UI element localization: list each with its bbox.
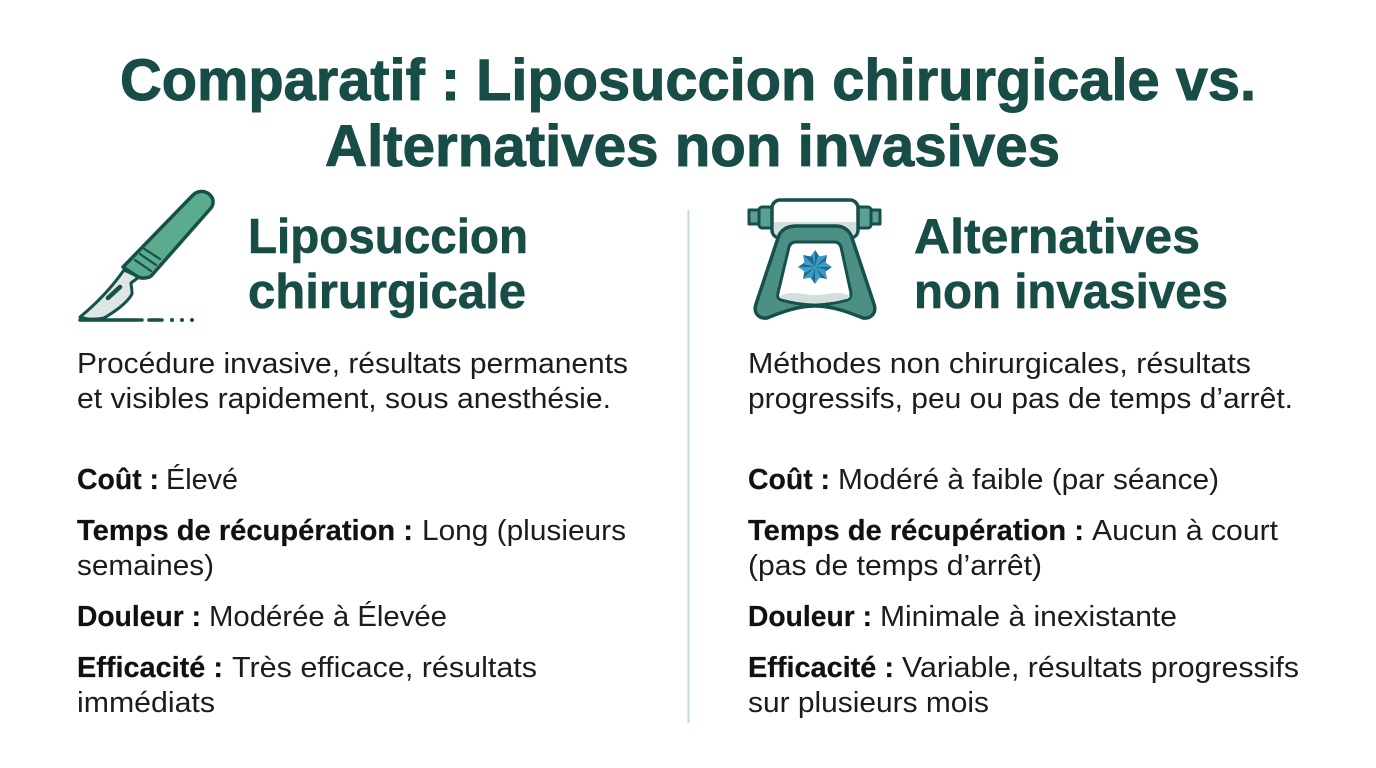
criterion: coût: Modéré à faible (par séance) — [838, 464, 1219, 496]
description: alternatives: Méthodes non chirurgicales, résultats — [748, 348, 1251, 380]
title: Alternatives non invasives — [325, 114, 1060, 179]
criterion: efficacité: sur plusieurs mois — [748, 687, 989, 719]
criterion: douleur — [748, 601, 1177, 633]
criterion: efficacité — [748, 652, 1299, 719]
criterion: douleur: Douleur : — [77, 601, 201, 633]
heading: liposuccion chirurgicale — [248, 210, 528, 319]
criterion: coût: Coût : — [77, 464, 159, 496]
title — [120, 48, 1256, 179]
description: liposuccion — [77, 348, 628, 415]
heading: alternatives non invasives: non invasives — [914, 265, 1228, 319]
icon: non-invasive device — [749, 200, 880, 318]
criterion: efficacité: Très efficace, résultats — [232, 652, 537, 684]
description: alternatives: progressifs, peu ou pas de temps d’arrêt. — [748, 383, 1293, 415]
icon: scalpel — [80, 191, 213, 322]
criterion: douleur: Modérée à Élevée — [209, 600, 447, 633]
heading: liposuccion chirurgicale: chirurgicale — [248, 265, 526, 319]
criterion: temps de récupération: semaines) — [77, 550, 214, 582]
criterion: efficacité: Efficacité : — [77, 652, 223, 684]
criterion: coût — [77, 463, 238, 496]
criterion: efficacité: Variable, résultats progressifs — [902, 652, 1299, 684]
heading: liposuccion chirurgicale: Liposuccion — [248, 210, 528, 264]
criterion: efficacité: Efficacité : — [748, 652, 894, 684]
criterion: efficacité: immédiats — [77, 687, 215, 719]
criterion: temps de récupération: Long (plusieurs — [422, 515, 626, 547]
description: liposuccion: Procédure invasive, résultats permanents — [77, 348, 628, 380]
criterion: temps de récupération: Temps de récupération : — [748, 515, 1084, 547]
criterion: temps de récupération: Aucun à court — [1092, 515, 1278, 547]
criterion: coût: Coût : — [748, 464, 830, 496]
panel: alternatives non invasives — [748, 200, 1299, 719]
description: liposuccion: et visibles rapidement, sous anesthésie. — [77, 383, 611, 415]
heading: alternatives non invasives: Alternatives — [914, 210, 1200, 264]
criterion: coût: Élevé — [166, 463, 238, 496]
description: alternatives — [748, 348, 1293, 415]
criterion: temps de récupération — [748, 515, 1278, 582]
panel: liposuccion chirurgicale — [77, 191, 628, 719]
heading: alternatives non invasives — [914, 210, 1228, 319]
criterion: douleur — [77, 600, 447, 633]
criterion: temps de récupération: Temps de récupération : — [77, 515, 413, 547]
title: Comparatif : Liposuccion chirurgicale vs. — [120, 48, 1256, 113]
criterion: douleur: Douleur : — [748, 601, 872, 633]
criterion: douleur: Minimale à inexistante — [880, 601, 1177, 633]
criterion: temps de récupération — [77, 515, 626, 582]
criterion: efficacité — [77, 652, 537, 719]
icon: blue snowflake mark — [798, 250, 832, 284]
criterion: temps de récupération: (pas de temps d’arrêt) — [748, 550, 1042, 582]
